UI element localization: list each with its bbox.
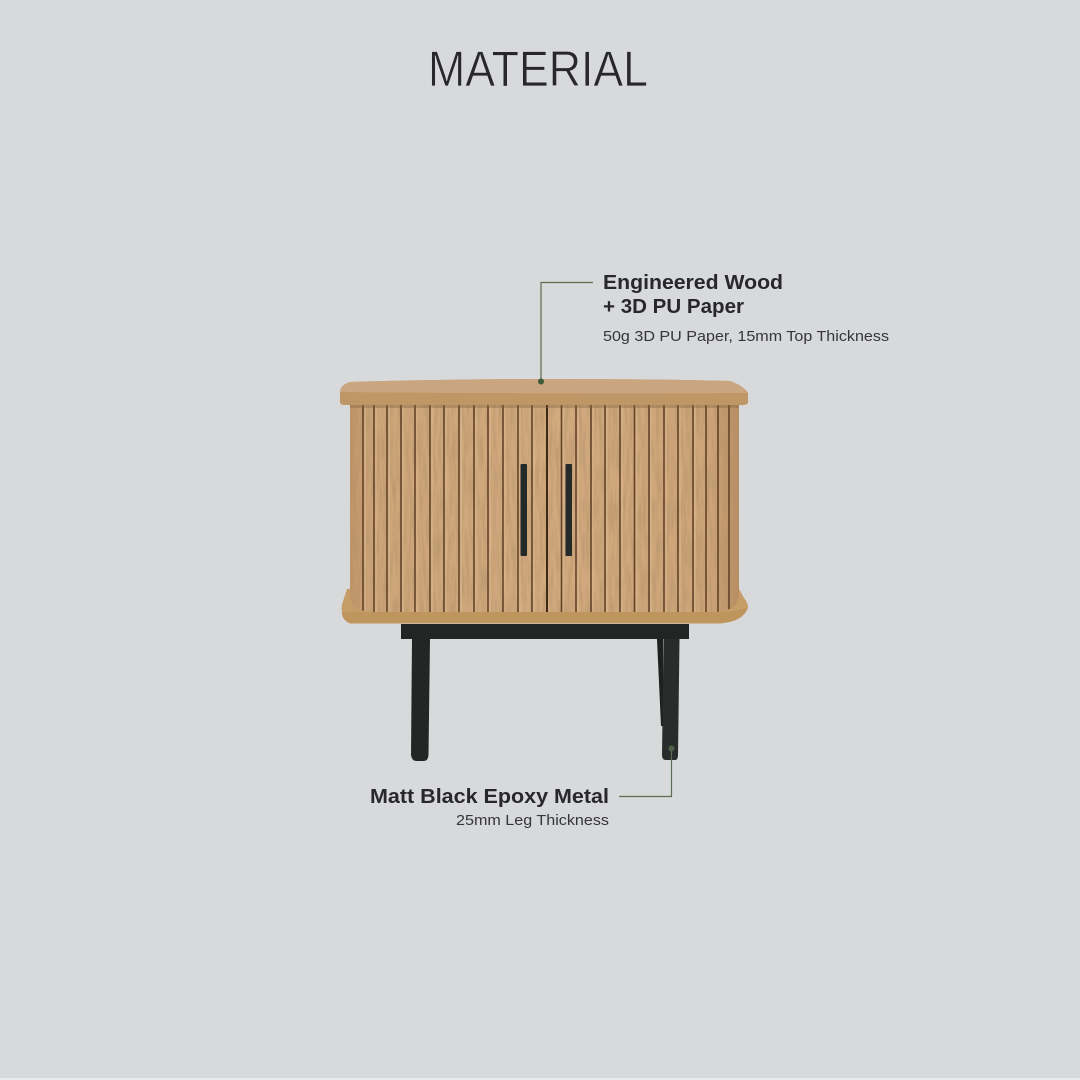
- door handles: [520, 464, 572, 556]
- leader line: [541, 282, 593, 381]
- door split: [546, 405, 548, 612]
- slatted wood body: [350, 405, 739, 612]
- callout detail: 50g 3D PU Paper, 15mm Top Thickness: [603, 328, 889, 345]
- callout: matt black epoxy metal: [370, 746, 674, 829]
- bottom wood shelf: [342, 587, 748, 624]
- slat grooves: [363, 405, 729, 612]
- callout: engineered wood: + 3D PU Paper: [603, 296, 744, 318]
- callout detail: 25mm Leg Thickness: [456, 812, 609, 829]
- callout heading: Engineered Wood: [603, 272, 783, 294]
- leader dot: [668, 746, 674, 752]
- title: MATERIAL: [428, 41, 648, 97]
- leader dot: [538, 378, 544, 384]
- callout heading: Matt Black Epoxy Metal: [370, 786, 609, 808]
- slat highlights: [365, 405, 695, 612]
- wood top: [340, 379, 748, 405]
- nightstand product image: [340, 379, 748, 761]
- black metal legs and frame: [401, 624, 689, 761]
- leader line: [619, 750, 672, 796]
- callout: engineered wood: [538, 272, 889, 384]
